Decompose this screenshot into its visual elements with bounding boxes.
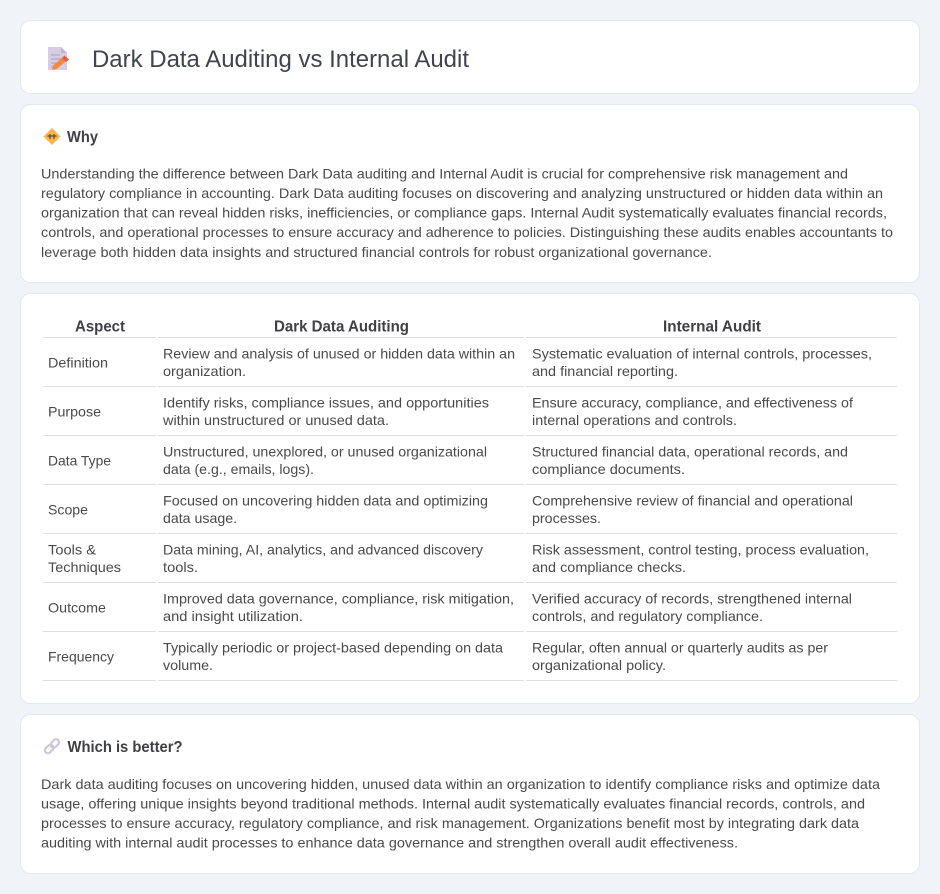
text block: why paragraph: Understanding the difference between Dark Data auditing and Internal Audit is crucial for comprehensive risk management and: [41, 166, 848, 182]
table row: frequency: volume.: [163, 657, 213, 673]
table row: scope: Scope: [48, 502, 88, 518]
table row: data type: Structured financial data, operational records, and: [532, 444, 848, 460]
table row: outcome: Outcome: [48, 600, 106, 616]
icon: warning diamond: [44, 128, 60, 145]
text block: which is better paragraph: auditing with internal audit processes to enhance data governance and strengthen overall audit effectiveness.: [41, 834, 738, 850]
text block: which is better paragraph: Dark data auditing focuses on uncovering hidden, unused data within an organization to identify compliance risks and optimize data: [41, 776, 880, 792]
icon: chain link: [44, 738, 60, 754]
table row: purpose: Ensure accuracy, compliance, and effectiveness of: [532, 394, 853, 410]
table row: frequency: Typically periodic or project-based depending on data: [163, 640, 503, 656]
table row: frequency: organizational policy.: [532, 657, 666, 673]
table row: definition: organization.: [163, 363, 246, 379]
table header row: Aspect: [75, 318, 126, 336]
table row: purpose: within unstructured or unused data.: [162, 412, 389, 428]
table row: purpose: [43, 394, 897, 436]
table row: tools and techniques: Tools &: [48, 542, 97, 558]
panel: which is better: [20, 714, 920, 874]
text block: why paragraph: [41, 166, 893, 260]
table row: outcome: and insight utilization.: [163, 608, 303, 624]
table row: definition: and financial reporting.: [532, 363, 678, 379]
heading: which is better: Which is better?: [68, 739, 182, 756]
table header row: Internal Audit: [663, 318, 762, 336]
table header row: [43, 318, 897, 338]
table row: tools and techniques: Data mining, AI, analytics, and advanced discovery: [163, 542, 483, 558]
table row: tools and techniques: tools.: [163, 559, 198, 575]
table row: definition: Review and analysis of unused or hidden data within an: [163, 346, 515, 362]
table row: definition: Systematic evaluation of internal controls, processes,: [532, 346, 872, 362]
table row: purpose: Purpose: [48, 404, 101, 420]
text block: why paragraph: controls, and operational processes to ensure accuracy and adherence to policies. Distinguishing these audits enables accountants to: [41, 224, 893, 240]
table row: scope: Comprehensive review of financial and operational: [532, 492, 853, 508]
table row: outcome: controls, and regulatory compliance.: [532, 608, 763, 624]
heading: why: Why: [67, 129, 98, 146]
table row: data type: [43, 444, 897, 485]
table row: scope: [43, 492, 897, 534]
table row: frequency: Regular, often annual or quarterly audits as per: [532, 640, 828, 656]
text block: why paragraph: organization that can reveal hidden risks, inefficiencies, or compliance gaps. Internal Audit systematically evaluates financial records,: [41, 204, 887, 220]
table row: scope: processes.: [532, 510, 601, 526]
text block: which is better paragraph: [41, 776, 880, 850]
table row: scope: data usage.: [163, 510, 237, 526]
text block: why paragraph: regulatory compliance in accounting. Dark Data auditing focuses on discovering and analyzing unstructured or hidden data within an: [41, 185, 883, 201]
table row: data type: Data Type: [48, 452, 111, 468]
table row: tools and techniques: Techniques: [48, 559, 121, 575]
table row: data type: Unstructured, unexplored, or unused organizational: [163, 444, 487, 460]
table row: tools and techniques: and compliance checks.: [532, 559, 686, 575]
table row: scope: Focused on uncovering hidden data and optimizing: [163, 492, 488, 508]
table row: tools and techniques: Risk assessment, control testing, process evaluation,: [532, 542, 869, 558]
panel: title header: [20, 20, 920, 94]
table row: purpose: internal operations and controls.: [532, 412, 737, 428]
table row: outcome: Verified accuracy of records, strengthened internal: [532, 590, 852, 606]
table row: frequency: Frequency: [48, 648, 114, 664]
table row: data type: data (e.g., emails, logs).: [163, 461, 314, 477]
text block: which is better paragraph: processes to ensure accuracy, regulatory compliance, and risk management. Organizations benefit most by integrating dark data: [41, 815, 859, 831]
panel: comparison table: [20, 294, 920, 704]
table row: definition: Definition: [48, 354, 108, 370]
table row: definition: [43, 346, 897, 387]
table row: purpose: Identify risks, compliance issues, and opportunities: [163, 394, 489, 410]
table header row: Dark Data Auditing: [274, 318, 409, 336]
table row: data type: compliance documents.: [532, 461, 685, 477]
table row: frequency: [43, 640, 897, 681]
title: Dark Data Auditing vs Internal Audit: [92, 46, 469, 73]
text block: why paragraph: leverage both hidden data insights and structured financial controls for robust organizational governance.: [41, 244, 712, 260]
panel: why: [20, 104, 920, 282]
icon: document with pencil: [48, 47, 69, 70]
table row: outcome: Improved data governance, compliance, risk mitigation,: [163, 590, 514, 606]
text block: which is better paragraph: usage, offering unique insights beyond traditional methods. Internal audit systematically evaluates financial records, controls, and: [41, 796, 865, 812]
table row: outcome: [43, 590, 897, 632]
table row: tools and techniques: [43, 542, 897, 583]
